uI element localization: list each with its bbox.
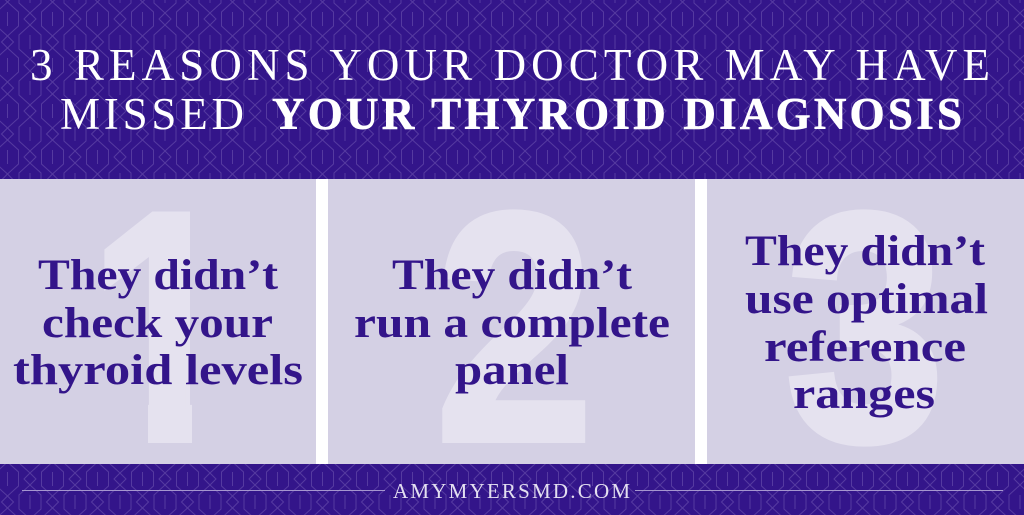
big number 2: 2 [435, 146, 594, 510]
reason 2 text [354, 252, 670, 394]
footer band [0, 464, 1024, 515]
title: MISSED [60, 89, 244, 139]
reason 2 text: They didn’t [392, 252, 633, 299]
reason 3 text: use optimal [745, 276, 988, 323]
reason 2 text: run a complete [354, 300, 670, 347]
reason 1 text: check your [42, 300, 273, 347]
title: 3 REASONS YOUR DOCTOR MAY HAVE [30, 40, 990, 90]
big number 1: 1 [88, 142, 238, 511]
reason 1 text [13, 252, 303, 394]
reason 3 text: They didn’t [745, 228, 986, 275]
reason 1 text: thyroid levels [13, 347, 303, 394]
panel: reason 3 [707, 146, 1024, 510]
header band [0, 0, 1024, 179]
reason 2 text: panel [455, 347, 569, 394]
reason 3 text [745, 228, 988, 418]
title [30, 40, 990, 139]
title: YOUR THYROID DIAGNOSIS [272, 89, 962, 139]
reason 1 text: They didn’t [38, 252, 279, 299]
panel: reason 2 [328, 146, 695, 510]
panel: reason 1 [0, 179, 316, 464]
reason 3 text: reference [764, 324, 966, 371]
reason 3 text: ranges [793, 371, 935, 418]
big number 3: 3 [785, 146, 945, 510]
website url: AMYMYERSMD.COM [393, 479, 630, 503]
